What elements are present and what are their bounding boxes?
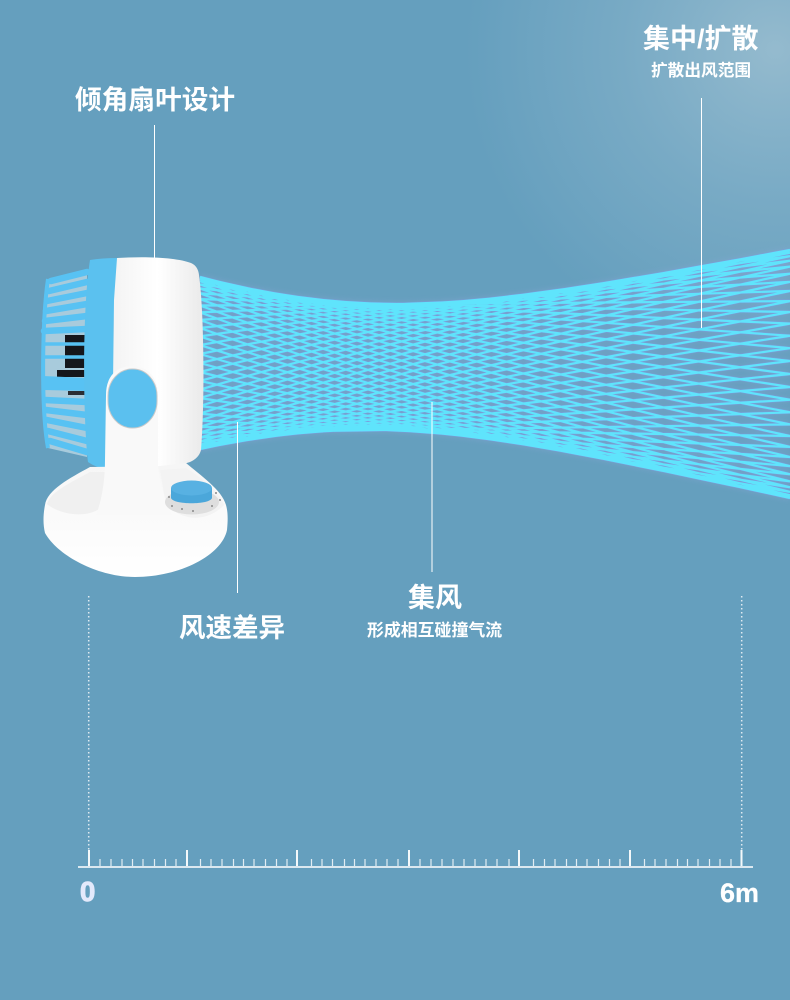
ruler label: 6m: 6m <box>720 878 759 908</box>
fan product <box>43 257 228 577</box>
label: focus/diffuse <box>643 24 759 80</box>
major ticks <box>89 850 742 866</box>
ruler baseline <box>78 866 753 868</box>
label: concentrated air <box>367 583 502 640</box>
fan grille <box>43 270 87 457</box>
label: speed difference: 风速差异 <box>179 613 285 643</box>
leader line: focus/diffuse <box>701 98 702 328</box>
leader line: concentrated air <box>432 402 433 572</box>
label: tilted blade design: 倾角扇叶设计 <box>75 85 235 115</box>
speed dial <box>165 480 221 514</box>
dotted end markers <box>89 596 742 850</box>
minor ticks <box>100 859 731 866</box>
heading: focus/diffuse: 集中/扩散 <box>643 24 759 54</box>
air stream mesh <box>200 250 790 498</box>
subtext: diffusion range: 扩散出风范围 <box>651 60 751 80</box>
subtext: colliding airflow: 形成相互碰撞气流 <box>367 620 502 640</box>
blue pivot button <box>108 369 157 428</box>
stand arm <box>96 366 172 515</box>
stand base <box>44 463 228 577</box>
blue front ring <box>84 258 118 469</box>
distance ruler <box>78 596 759 908</box>
ruler label: 0: 0 <box>80 876 95 907</box>
leader line: blade <box>154 125 155 258</box>
heading: concentrated air: 集风 <box>408 583 462 613</box>
leader line: speed difference <box>237 422 238 593</box>
white fan housing <box>112 257 203 468</box>
